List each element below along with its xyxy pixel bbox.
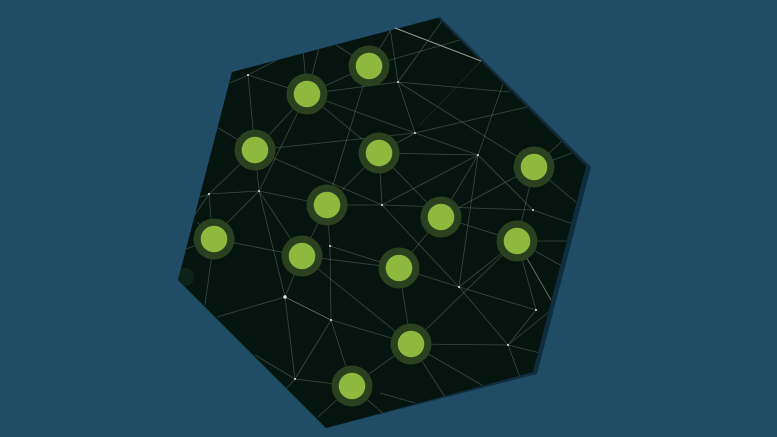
faint corner circle [178, 268, 194, 286]
node 5 [514, 146, 554, 188]
connection lines [183, 21, 577, 417]
node 4 [358, 132, 400, 174]
small white nodes [208, 74, 537, 380]
node 2 [286, 74, 328, 114]
hexagon panel [178, 18, 586, 428]
node 13 [332, 366, 372, 406]
node 9 [496, 220, 538, 262]
node 7 [420, 196, 462, 238]
node 12 [390, 324, 432, 364]
hexagon side shadow [178, 17, 591, 428]
node 6 [306, 184, 348, 226]
bright edge streak [395, 28, 481, 61]
node 11 [378, 248, 420, 288]
network hexagon illustration [178, 17, 591, 428]
node 10 [282, 236, 322, 276]
node 1 [348, 46, 390, 86]
green nodes [194, 46, 554, 406]
node 3 [234, 130, 276, 170]
node 8 [194, 218, 234, 260]
